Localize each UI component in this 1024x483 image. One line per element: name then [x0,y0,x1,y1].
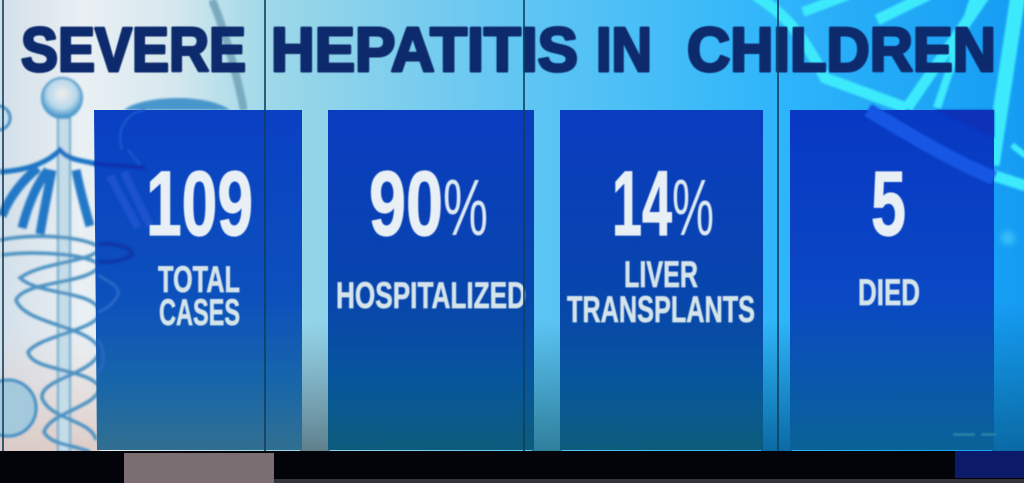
background: warm lower left [0,330,100,452]
title [21,16,996,85]
title: CHILDREN [687,16,996,85]
background: right edge fade [992,300,1024,452]
title: IN [596,16,652,85]
lower left medallion [0,380,36,436]
panel: hospitalized [328,110,534,450]
dome above panel [124,98,230,110]
upper left knob [0,106,10,130]
percent sign: % [443,163,488,252]
panel: total cases [94,110,302,450]
decorative streak [868,110,994,178]
decorative arc [212,0,244,110]
label: DIED [858,272,920,313]
icon: caduceus [0,78,100,452]
title: HEPATITIS [271,16,578,85]
wings [0,150,100,172]
value: 5 [871,153,906,255]
background: gap fade 3 [761,320,792,452]
label: HOSPITALIZED [336,275,526,316]
icon: caduceus seen through panel [94,110,150,372]
value: 90 [369,153,443,255]
glow: right edge [1001,231,1015,245]
label line 2: CASES [159,292,240,333]
decorative dark patch [935,110,994,138]
background: gap fade 2 [532,320,562,452]
percent sign: % [672,163,714,252]
serpents [0,236,100,452]
panel: died [790,110,996,450]
bottom bar [0,451,1024,483]
illegible watermark smudge [953,433,996,436]
panel: liver transplants [560,110,763,450]
label: LIVER [624,254,698,295]
value: 14 [612,153,672,255]
value: 109 [146,153,253,255]
icon: DNA strands [755,0,1024,186]
vertical screen seams [3,0,778,452]
knob [42,78,82,118]
background: gap fade 1 [300,320,330,452]
label line 2: TRANSPLANTS [567,289,755,330]
title: SEVERE [21,16,246,85]
staff [58,118,70,452]
label: TOTAL [158,259,240,300]
